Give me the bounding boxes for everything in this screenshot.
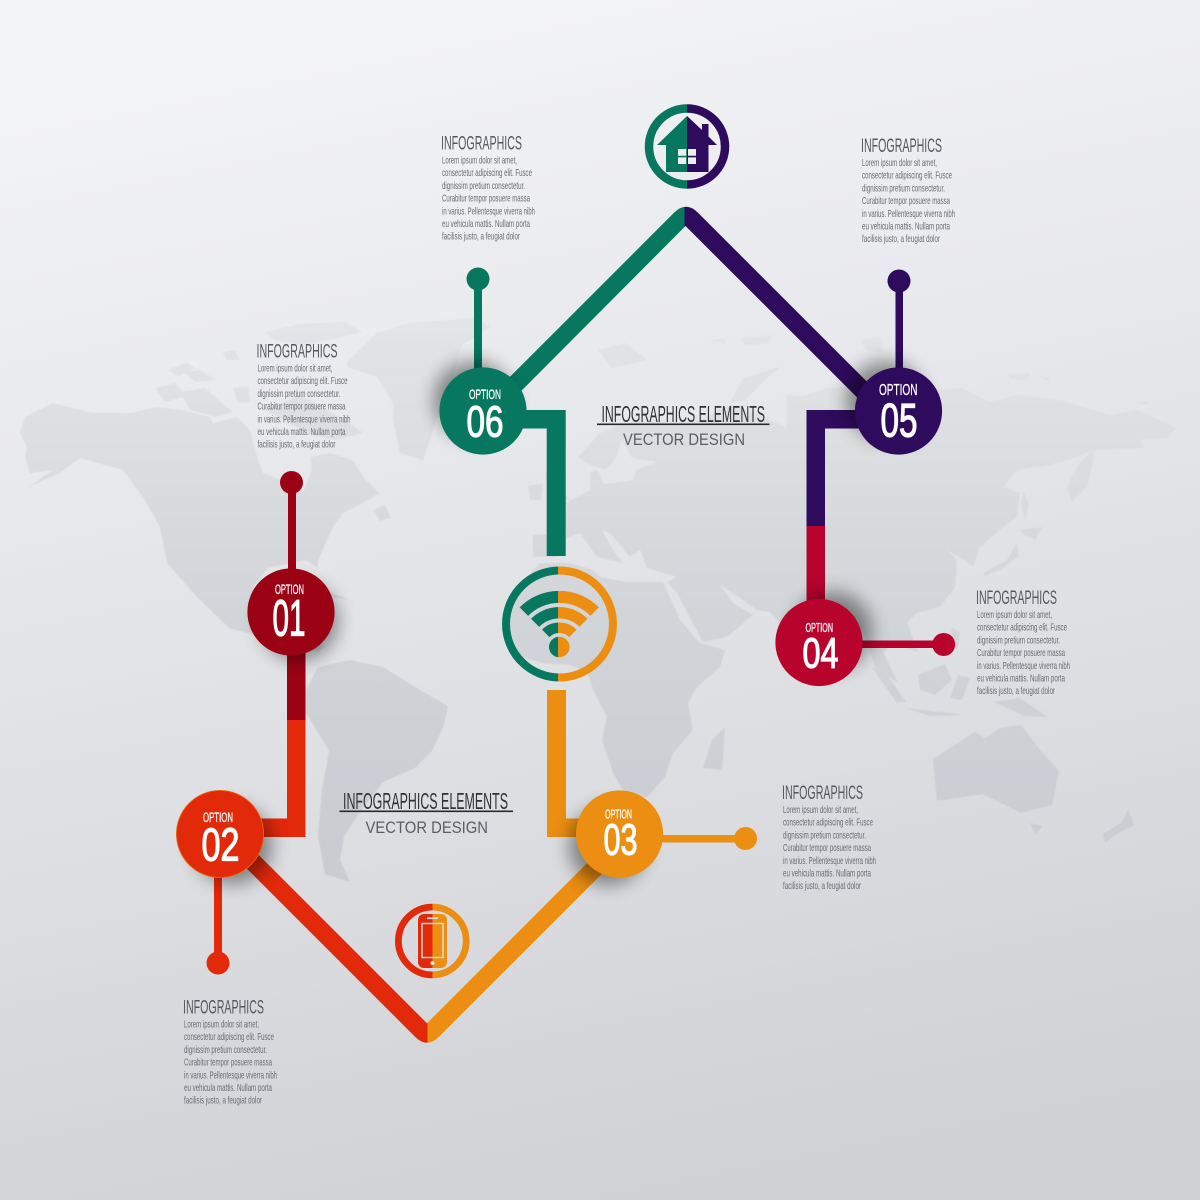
text block: option 04: consectetur adipiscing elit. Fusce — [977, 623, 1067, 634]
text block: option 03: facilisis justo, a feugiat dolor — [783, 881, 861, 892]
connector: valley lines to options 02 and 03 — [219, 828, 631, 1043]
text block: option 02: consectetur adipiscing elit. Fusce — [184, 1032, 274, 1043]
text block: option 02 — [183, 998, 277, 1107]
badge: option 02 — [176, 790, 264, 878]
text block: option 03: INFOGRAPHICS — [782, 783, 863, 804]
Africa — [507, 563, 725, 797]
text block: top left: dignissim pretium consectetur. — [442, 181, 525, 192]
connector: wifi to option 03 — [547, 690, 600, 837]
badge: option 02: 02 — [202, 818, 240, 870]
heading: infographics elements (top) — [597, 401, 770, 449]
text block: option 04 — [976, 588, 1070, 697]
text block: top left — [441, 134, 535, 243]
text block: option 03: dignissim pretium consectetur. — [783, 830, 866, 841]
heading: infographics elements (top): INFOGRAPHICS ELEMENTS — [602, 401, 765, 427]
islands — [318, 335, 1150, 843]
text block: top right: in varius. Pellentesque viverra nibh — [862, 209, 955, 220]
text block: top right: Curabitur tempor posuere massa — [862, 196, 950, 207]
text block: option 01: eu vehicula mattis. Nullam porta — [258, 427, 346, 438]
text block: option 02: Curabitur tempor posuere massa — [184, 1058, 272, 1069]
badge: option 01 — [247, 568, 335, 656]
heading: infographics elements (bottom) — [340, 788, 513, 837]
text block: option 04: facilisis justo, a feugiat dolor — [977, 686, 1055, 697]
pin: option 06 — [466, 268, 490, 379]
connector: option 01 to option 02 — [255, 650, 306, 837]
text block: top right: facilisis justo, a feugiat dolor — [862, 234, 940, 245]
pin: option 05 — [888, 270, 910, 381]
text block: option 03 — [782, 783, 876, 892]
badge: option 04: OPTION — [806, 620, 833, 635]
text block: option 04: Curabitur tempor posuere massa — [977, 648, 1065, 659]
text block: option 01: in varius. Pellentesque viverra nibh — [258, 414, 350, 425]
South America — [306, 660, 448, 882]
pin: option 03 — [640, 827, 757, 850]
circle shadows — [194, 361, 924, 885]
text block: option 01: dignissim pretium consectetur. — [258, 389, 340, 400]
text block: option 01 — [256, 342, 350, 451]
badge: option 05: OPTION — [879, 382, 918, 399]
text block: option 01: Lorem ipsum dolor sit amet, — [258, 364, 332, 374]
Eurasia — [533, 385, 1177, 683]
badge: option 05 — [855, 367, 942, 455]
text block: option 04: Lorem ipsum dolor sit amet, — [977, 610, 1052, 621]
icon: wifi — [506, 570, 613, 678]
text block: top left: consectetur adipiscing elit. Fusce — [442, 168, 532, 179]
badge: option 02: OPTION — [203, 809, 233, 825]
text block: top left: INFOGRAPHICS — [441, 134, 522, 154]
Australia — [933, 725, 1059, 813]
text block: top left: Lorem ipsum dolor sit amet, — [442, 156, 517, 166]
Newfoundland — [373, 505, 391, 521]
text block: option 01: INFOGRAPHICS — [256, 342, 338, 362]
badge: option 06: OPTION — [469, 386, 501, 402]
pin: option 02 — [206, 860, 230, 974]
text block: option 02: eu vehicula mattis. Nullam porta — [184, 1083, 272, 1094]
icon: house — [649, 108, 725, 184]
text block: top right — [861, 136, 955, 245]
badge: option 01: 01 — [272, 590, 306, 646]
text block: option 04: dignissim pretium consectetur. — [977, 635, 1060, 646]
badge: option 06: 06 — [466, 398, 504, 446]
text block: option 03: in varius. Pellentesque viverra nibh — [783, 856, 876, 867]
badge: option 04 — [775, 599, 863, 686]
connector: option 06 to wifi — [490, 410, 566, 556]
icon: smartphone — [398, 907, 466, 975]
text block: option 01: Curabitur tempor posuere massa — [258, 402, 346, 413]
text block: option 01: consectetur adipiscing elit. Fusce — [258, 376, 348, 387]
badge: option 03: OPTION — [605, 806, 632, 822]
world map — [20, 318, 1177, 882]
connector: roof lines to options 06 and 05 — [484, 207, 891, 419]
North America — [20, 403, 380, 652]
badge: option 05: 05 — [880, 394, 918, 446]
text block: top right: consectetur adipiscing elit. Fusce — [862, 171, 952, 182]
text block: option 02: Lorem ipsum dolor sit amet, — [184, 1020, 259, 1030]
text block: option 03: consectetur adipiscing elit. Fusce — [783, 818, 873, 829]
badge: option 04: 04 — [802, 630, 838, 678]
text block: option 04: in varius. Pellentesque viverra nibh — [977, 661, 1070, 672]
text block: option 03: Lorem ipsum dolor sit amet, — [783, 805, 858, 816]
text block: option 02: facilisis justo, a feugiat dolor — [184, 1096, 262, 1107]
text block: top left: in varius. Pellentesque viverra nibh — [442, 206, 535, 217]
text block: option 02: dignissim pretium consectetur. — [184, 1045, 267, 1056]
badge: option 06 — [439, 367, 527, 455]
Arctic islands — [155, 322, 363, 440]
badge: option 01: OPTION — [275, 581, 304, 597]
Greenland — [347, 318, 490, 460]
badge: option 03 — [576, 790, 663, 878]
heading: infographics elements (bottom): VECTOR DESIGN — [366, 818, 488, 837]
connector: option 05 to option 04 — [806, 410, 880, 616]
text block: top right: Lorem ipsum dolor sit amet, — [862, 158, 937, 169]
text block: option 03: Curabitur tempor posuere massa — [783, 843, 871, 854]
text block: option 02: INFOGRAPHICS — [183, 998, 264, 1018]
text block: option 02: in varius. Pellentesque viverra nibh — [184, 1070, 277, 1081]
text block: top right: INFOGRAPHICS — [861, 136, 942, 157]
text block: top left: Curabitur tempor posuere massa — [442, 194, 530, 205]
text block: option 01: facilisis justo, a feugiat dolor — [258, 440, 336, 451]
text block: option 03: eu vehicula mattis. Nullam porta — [783, 868, 871, 880]
text block: top right: dignissim pretium consectetur. — [862, 183, 945, 194]
pin: option 04 — [840, 633, 955, 656]
text block: top left: facilisis justo, a feugiat dolor — [442, 232, 520, 243]
text block: option 04: INFOGRAPHICS — [976, 588, 1057, 609]
text block: option 04: eu vehicula mattis. Nullam porta — [977, 674, 1065, 684]
text block: top left: eu vehicula mattis. Nullam porta — [442, 219, 530, 230]
heading: infographics elements (bottom): INFOGRAPHICS ELEMENTS — [343, 788, 508, 814]
text block: top right: eu vehicula mattis. Nullam porta — [862, 222, 950, 232]
pin: option 01 — [280, 471, 303, 582]
badge: option 03: 03 — [604, 816, 638, 864]
heading: infographics elements (top): VECTOR DESIGN — [623, 430, 745, 449]
